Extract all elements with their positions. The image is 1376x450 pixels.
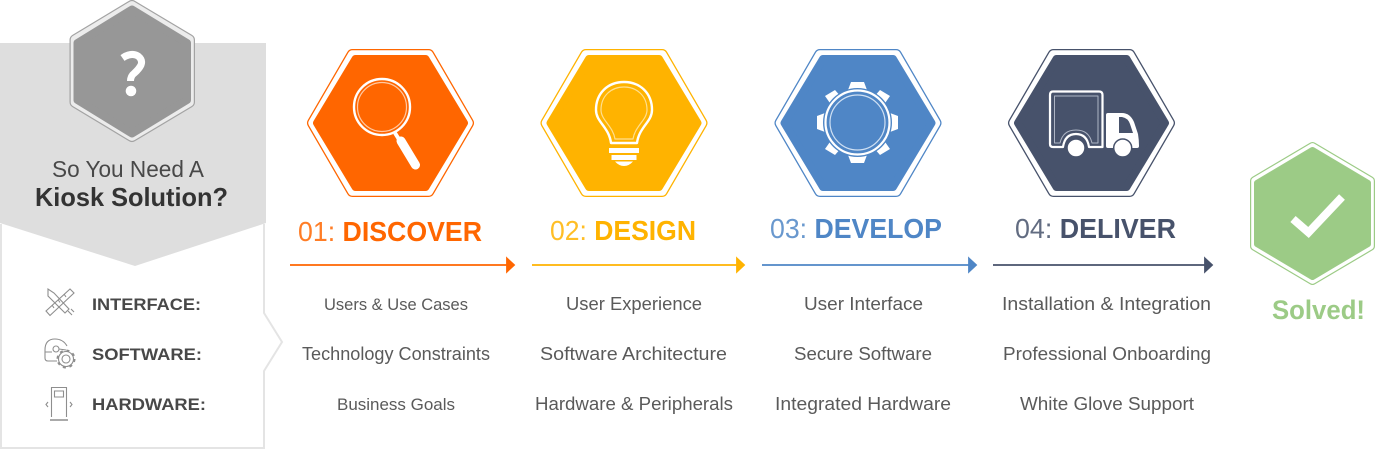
list: deliver: Installation & Integration	[1002, 294, 1211, 314]
arrow	[532, 258, 744, 272]
list: design: Software Architecture	[540, 344, 727, 364]
panel: kiosk question	[0, 6, 282, 448]
heading: 04 deliver: 04: DELIVER	[1015, 213, 1176, 244]
list: discover	[302, 295, 490, 414]
heading: kiosk solution: Kiosk Solution?	[35, 182, 228, 212]
heading: 01 discover: 01: DISCOVER	[298, 216, 482, 247]
panel grey banner	[0, 43, 266, 266]
list: design: User Experience	[566, 294, 702, 314]
list: develop	[775, 294, 951, 414]
list: deliver: White Glove Support	[1020, 394, 1194, 414]
list: design	[535, 294, 733, 414]
panel outline	[1, 224, 282, 448]
list: discover: Users & Use Cases	[324, 295, 468, 314]
icon: gear hexagon	[780, 55, 936, 191]
arrow	[993, 258, 1212, 272]
icon: truck hexagon	[1014, 55, 1169, 191]
icon: software gear	[45, 339, 74, 368]
step: design	[532, 55, 744, 414]
list: develop: Integrated Hardware	[775, 394, 951, 414]
label: solved: Solved!	[1272, 295, 1365, 325]
step: discover	[290, 55, 514, 414]
list: discover: Technology Constraints	[302, 344, 490, 364]
heading: 03 develop: 03: DEVELOP	[770, 213, 942, 244]
icon: kiosk hardware	[46, 388, 72, 420]
step: develop	[762, 55, 976, 414]
label: software: SOFTWARE:	[92, 345, 202, 364]
label: interface: INTERFACE:	[92, 295, 201, 314]
step: deliver	[993, 55, 1212, 414]
list: design: Hardware & Peripherals	[535, 394, 733, 414]
heading: 02 design: 02: DESIGN	[550, 215, 696, 246]
list: develop: Secure Software	[794, 344, 932, 364]
icon: check hexagon	[1255, 147, 1370, 280]
label: hardware: HARDWARE:	[92, 395, 206, 414]
icon: question hexagon	[76, 6, 189, 136]
outcome: solved	[1255, 147, 1370, 325]
icon: ruler and pen	[46, 289, 74, 316]
list: deliver: Professional Onboarding	[1003, 344, 1211, 364]
list: develop: User Interface	[804, 294, 923, 314]
list: deliver	[1002, 294, 1211, 414]
arrow	[290, 258, 514, 272]
list: discover: Business Goals	[337, 395, 455, 414]
heading: so you need a: So You Need A	[52, 156, 205, 182]
icon: magnifier hexagon	[313, 55, 468, 191]
arrow	[762, 258, 976, 272]
icon: light bulb hexagon	[546, 55, 702, 191]
